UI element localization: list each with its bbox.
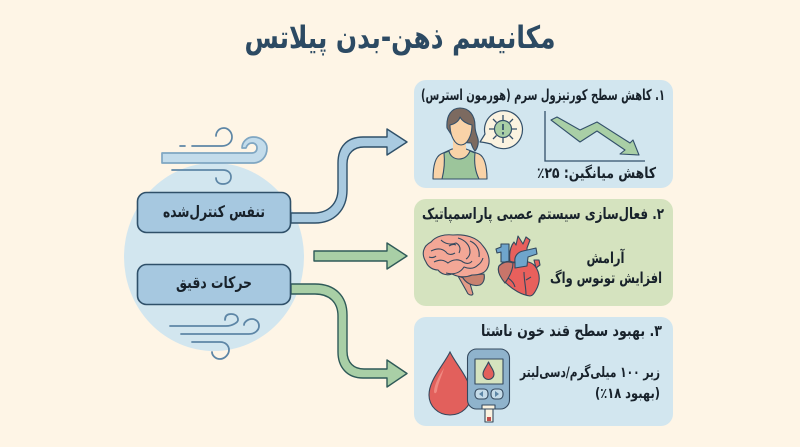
chart: decline (545, 111, 645, 161)
icon: glucose meter (468, 349, 510, 422)
arrow: to parasympathetic (314, 243, 407, 269)
heading: parasympathetic: ۲. فعال‌سازی سیستم عصبی پاراسمپاتیک (422, 205, 664, 224)
label: precise movements: حرکات دقیق (176, 273, 252, 292)
label: controlled breathing: تنفس کنترل‌شده (163, 202, 265, 221)
arrow: movement to glucose (291, 284, 407, 387)
icon: heart (496, 236, 540, 296)
heading: cortisol: ۱. کاهش سطح کورتیزول سرم (هورمون استرس) (421, 86, 665, 104)
heading: glucose: ۳. بهبود سطح قند خون ناشتا (481, 322, 662, 340)
panel: glucose (414, 317, 673, 426)
text: vagal tone: افزایش تونوس واگ (550, 269, 662, 287)
icon: woman (433, 108, 487, 179)
average reduction: کاهش میانگین: ۲۵٪ (537, 164, 656, 182)
icon: wind top (162, 128, 267, 184)
text: relaxation: آرامش (586, 249, 625, 267)
background circle (124, 163, 304, 351)
icon: wind bottom (170, 314, 259, 359)
panel: parasympathetic (414, 199, 673, 306)
text: improvement: (بهبود ۱۸٪) (595, 386, 660, 402)
title: مکانیسم ذهن-بدن پیلاتس (244, 20, 556, 56)
box: controlled breathing (138, 192, 290, 232)
icon: brain (423, 235, 489, 295)
icon: blood drop (429, 352, 471, 415)
exclamation mark (502, 124, 504, 134)
panel: cortisol (414, 80, 673, 188)
box: precise movements (138, 264, 290, 304)
text: glucose target: زیر ۱۰۰ میلی‌گرم/دسی‌لیتر (519, 363, 660, 381)
icon: stress bubble (480, 111, 523, 149)
arrow: breathing to cortisol (291, 129, 407, 223)
